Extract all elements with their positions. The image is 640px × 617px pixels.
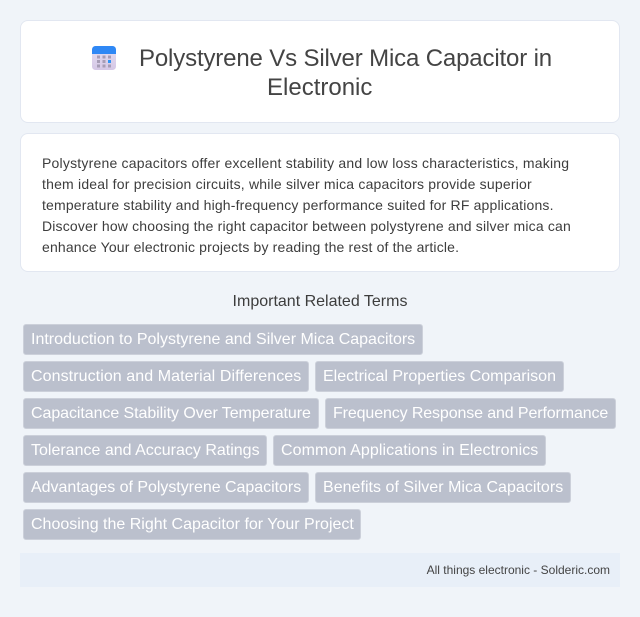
intro paragraph — [42, 155, 571, 255]
tag: Common Applications in Electronics — [281, 442, 538, 459]
header panel — [20, 20, 620, 123]
icon: calendar — [92, 46, 116, 70]
tag: Tolerance and Accuracy Ratings — [31, 442, 260, 459]
tag: Choosing the Right Capacitor for Your Project — [31, 516, 354, 533]
tag — [273, 435, 546, 466]
related term tags — [23, 324, 616, 540]
tag: Construction and Material Differences — [31, 368, 301, 385]
footer bar — [20, 553, 620, 587]
tag — [23, 361, 309, 392]
tag: Capacitance Stability Over Temperature — [31, 405, 311, 422]
tag — [315, 472, 571, 503]
tag: Introduction to Polystyrene and Silver Mica Capacitors — [31, 331, 415, 348]
section heading: Important Related Terms — [233, 293, 407, 310]
title: Polystyrene Vs Silver Mica Capacitor in — [139, 45, 552, 72]
intro text panel — [20, 133, 620, 272]
footer credit: All things electronic - Solderic.com — [427, 563, 610, 577]
tag — [325, 398, 616, 429]
tag — [23, 509, 361, 540]
intro paragraph: enhance Your electronic projects by reading the rest of the article. — [42, 239, 459, 255]
intro paragraph: temperature stability and high-frequency performance suited for RF applications. — [42, 197, 554, 213]
title: Electronic — [267, 74, 372, 101]
tag — [23, 472, 309, 503]
intro paragraph: Discover how choosing the right capacitor between polystyrene and silver mica can — [42, 218, 571, 234]
tag — [23, 324, 423, 355]
intro paragraph: Polystyrene capacitors offer excellent stability and low loss characteristics, making — [42, 155, 569, 171]
tag: Electrical Properties Comparison — [323, 368, 556, 385]
intro paragraph: them ideal for precision circuits, while silver mica capacitors provide superior — [42, 176, 532, 192]
tag — [23, 435, 267, 466]
tag: Frequency Response and Performance — [333, 405, 608, 422]
tag: Benefits of Silver Mica Capacitors — [323, 479, 563, 496]
tag — [315, 361, 564, 392]
title — [139, 45, 552, 101]
tag — [23, 398, 319, 429]
tag: Advantages of Polystyrene Capacitors — [31, 479, 301, 496]
